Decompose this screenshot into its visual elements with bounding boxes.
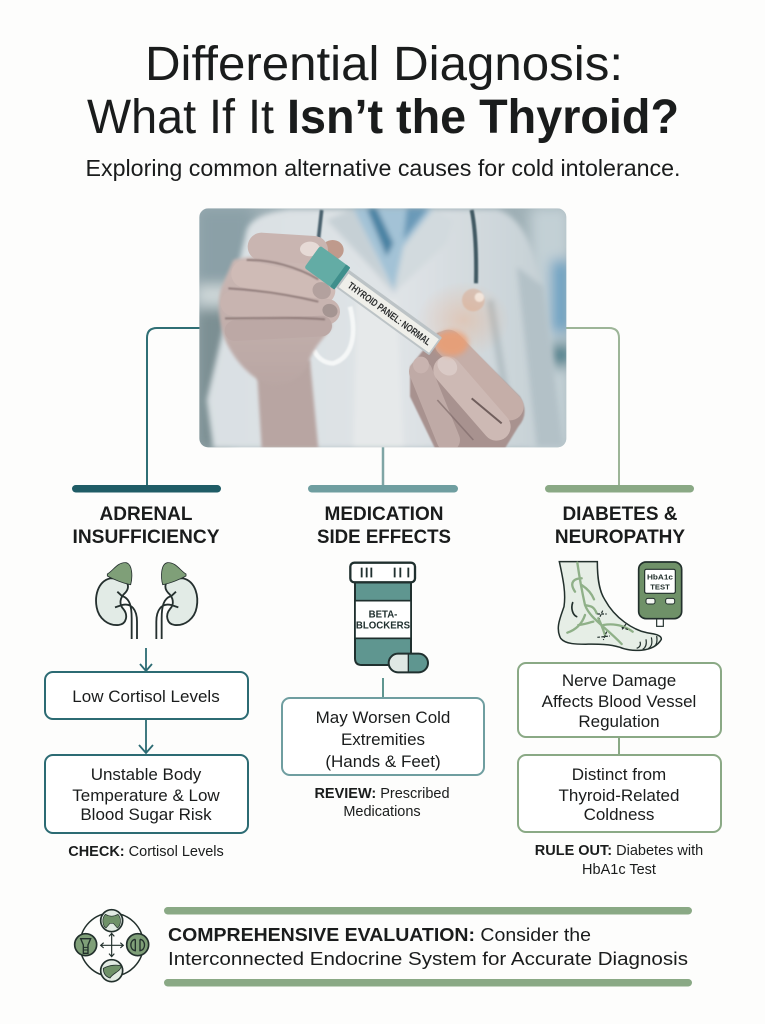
heading: ADRENAL: [100, 504, 193, 525]
box: nerve damage: [518, 663, 721, 737]
column bar: [72, 485, 221, 492]
footer text: COMPREHENSIVE EVALUATION: Consider the: [168, 924, 591, 945]
box: unstable body temperature: [45, 755, 248, 833]
connector: bottle to box: [382, 678, 384, 698]
rule out note: HbA1c Test: [582, 862, 656, 878]
connector: photo to medication column: [382, 447, 384, 487]
title: What If It Isn’t the Thyroid?: [87, 91, 679, 144]
photo: doctor holding thyroid panel tube: [197, 207, 570, 450]
subtitle: Exploring common alternative causes for cold intolerance.: [86, 155, 680, 181]
box: unstable body temperature: Temperature & Low: [72, 786, 220, 805]
icon: HbA1c test meter: HbA1c: [647, 572, 674, 581]
box: nerve damage: Regulation: [578, 712, 660, 731]
icon: interconnected endocrine system: [75, 910, 149, 982]
connector: nerve damage to distinct coldness: [618, 737, 620, 754]
box: unstable body temperature: Blood Sugar Risk: [80, 805, 212, 824]
heading: SIDE EFFECTS: [317, 527, 451, 548]
box: may worsen cold extremities: [282, 698, 484, 775]
arrow: kidneys to low cortisol: [140, 648, 152, 671]
check note: CHECK: Cortisol Levels: [68, 844, 224, 860]
review note: REVIEW:: [314, 786, 376, 802]
box: unstable body temperature: Unstable Body: [91, 765, 202, 784]
right hand: [410, 331, 525, 448]
icon: foot with nerve damage: [558, 562, 661, 650]
icon: HbA1c test meter: [639, 562, 682, 626]
icon: kidneys with adrenal glands: [96, 563, 197, 639]
column: medication side effects: [282, 485, 484, 820]
box: distinct from thyroid coldness: [518, 755, 721, 832]
footer bar top: [164, 907, 692, 914]
box: may worsen cold extremities: (Hands & Feet): [325, 752, 441, 771]
box: distinct from thyroid coldness: Thyroid-Related: [559, 786, 679, 805]
box: nerve damage: Affects Blood Vessel: [542, 692, 696, 711]
footer text: Interconnected Endocrine System for Accurate Diagnosis: [168, 948, 688, 969]
heading: MEDICATION: [325, 504, 443, 525]
icon: beta-blocker pill bottle: BETA-: [369, 609, 397, 620]
connector: photo to diabetes column: [565, 328, 619, 487]
column: diabetes and neuropathy: [518, 485, 721, 878]
box: may worsen cold extremities: Extremities: [341, 730, 425, 749]
heading: DIABETES &: [562, 504, 678, 525]
test tube: [304, 246, 444, 357]
test tube: THYROID PANEL: NORMAL: [345, 280, 433, 348]
box: low cortisol levels: Low Cortisol Levels: [72, 687, 220, 706]
box: low cortisol levels: [45, 672, 248, 719]
left hand: [219, 240, 344, 448]
footer text: [168, 924, 688, 969]
icon: beta-blocker pill bottle: BLOCKERS: [356, 621, 411, 632]
box: nerve damage: Nerve Damage: [562, 671, 676, 690]
rule out note: Diabetes with: [612, 843, 703, 859]
icon: HbA1c test meter: TEST: [650, 582, 670, 591]
title: [87, 38, 679, 144]
review note: Prescribed: [376, 786, 450, 802]
column bar: [308, 485, 458, 492]
box: distinct from thyroid coldness: Distinct from: [572, 765, 666, 784]
connector: photo to adrenal column: [147, 328, 200, 487]
arrow: low cortisol to unstable temperature: [139, 719, 153, 753]
rule out note: RULE OUT:: [535, 843, 612, 859]
column bar: [545, 485, 694, 492]
footer: [75, 907, 692, 986]
heading: INSUFFICIENCY: [72, 527, 220, 548]
title: Differential Diagnosis:: [145, 38, 623, 91]
footer bar bottom: [164, 979, 692, 986]
column: adrenal insufficiency: [45, 485, 248, 860]
review note: Medications: [343, 804, 421, 820]
heading: NEUROPATHY: [555, 527, 685, 548]
icon: beta-blocker pill bottle: [350, 563, 428, 672]
box: may worsen cold extremities: May Worsen Cold: [316, 708, 450, 727]
box: distinct from thyroid coldness: Coldness: [584, 805, 654, 824]
